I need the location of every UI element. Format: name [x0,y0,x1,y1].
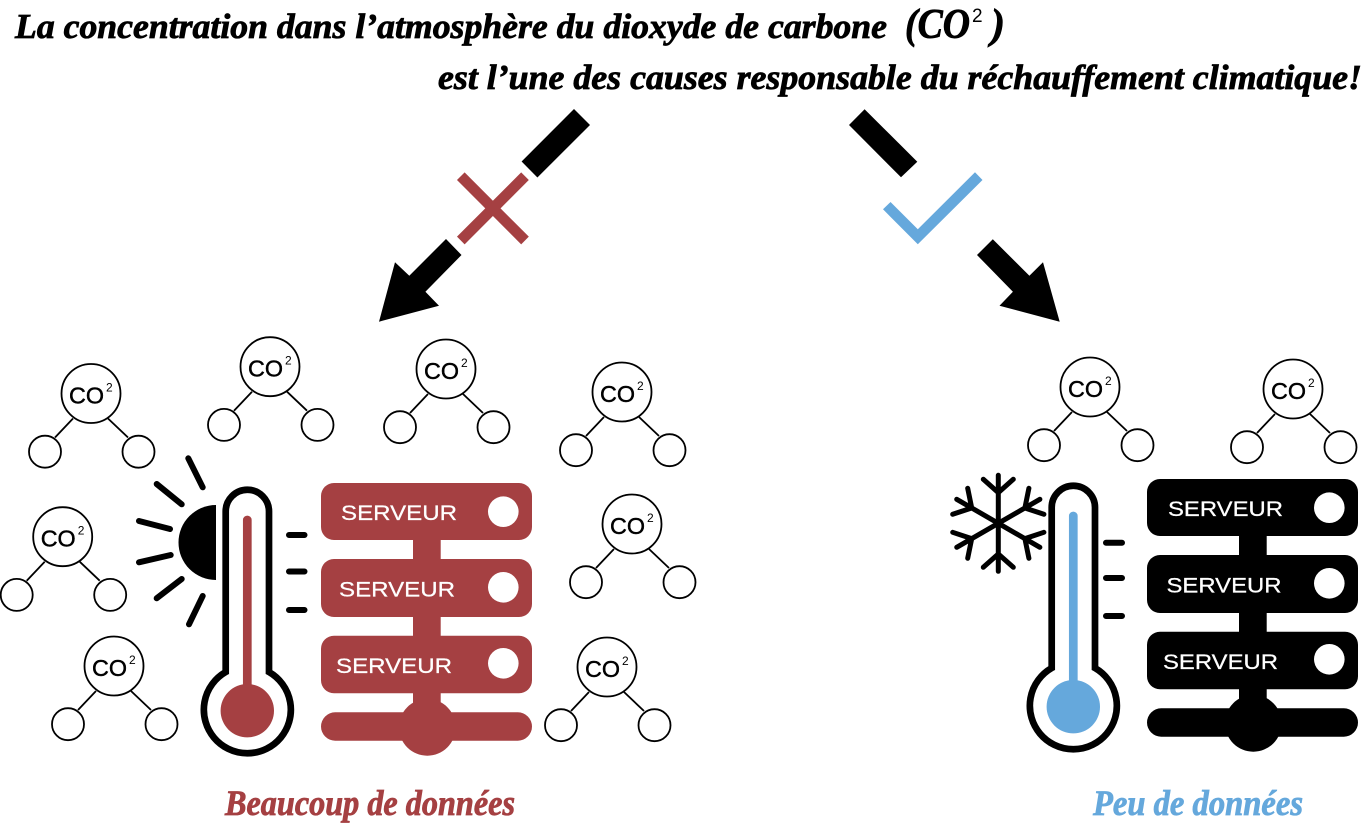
molecule: CO2: CO [585,656,620,682]
molecule: CO2 [384,340,510,443]
server stack: black: SERVEUR [1163,650,1278,674]
molecule: CO2 [29,364,154,468]
molecule: CO2: 2 [647,511,654,525]
molecule: CO2 [52,636,178,740]
title: 2 [972,6,983,27]
molecule: CO2: CO [1068,376,1103,402]
molecule: CO2 [570,494,696,598]
molecule: CO2: CO [1271,378,1306,404]
molecule: CO2: CO [69,382,104,408]
molecule: CO2: 2 [285,354,292,368]
molecule: CO2 [1231,360,1356,463]
molecule: CO2: CO [610,513,645,539]
molecule: CO2 [1,507,126,611]
server stack: red: SERVEUR [336,654,452,678]
molecule: CO2 [545,638,670,741]
molecule: CO2: 2 [129,653,136,667]
icon: red cross [461,176,525,240]
molecule: CO2: 2 [1105,374,1112,388]
server stack: red: SERVEUR [341,501,457,525]
arrow: right, accepted path [849,109,1060,322]
title: ) [987,2,1005,48]
molecule: CO2: CO [248,356,283,382]
molecule: CO2: 2 [1308,376,1315,390]
molecule: CO2: 2 [622,654,629,668]
molecule: CO2: CO [424,358,459,384]
title: La concentration dans l’atmosphère du dioxyde de carbone [14,7,887,46]
molecule: CO2: 2 [461,356,468,370]
server stack: red: SERVEUR [339,577,455,601]
arrow: left, rejected path [379,109,590,322]
label: many data: Beaucoup de données [224,783,515,823]
molecule: CO2: 2 [637,379,644,393]
molecule: CO2: 2 [106,380,113,394]
server stack: black: SERVEUR [1168,497,1283,521]
molecule: CO2: CO [41,526,76,552]
molecule: CO2: CO [600,381,635,407]
label: little data: Peu de données [1092,783,1303,823]
icon: blue check mark [883,172,982,244]
molecule: CO2 [560,362,686,466]
molecule: CO2: CO [92,655,127,681]
title [14,2,1362,97]
server stack: black [1147,479,1358,752]
icon: snowflake [949,475,1047,571]
icon: cold thermometer [1030,486,1122,749]
server stack: red [321,483,532,756]
title: est l’une des causes responsable du réchauffement climatique! [438,58,1362,97]
title: (CO [905,2,970,48]
molecule: CO2 [208,337,334,441]
icon: hot thermometer [204,490,304,753]
molecule: CO2 [1028,358,1154,461]
icon: sun [139,458,216,624]
molecule: CO2: 2 [78,524,85,538]
server stack: black: SERVEUR [1166,573,1282,597]
